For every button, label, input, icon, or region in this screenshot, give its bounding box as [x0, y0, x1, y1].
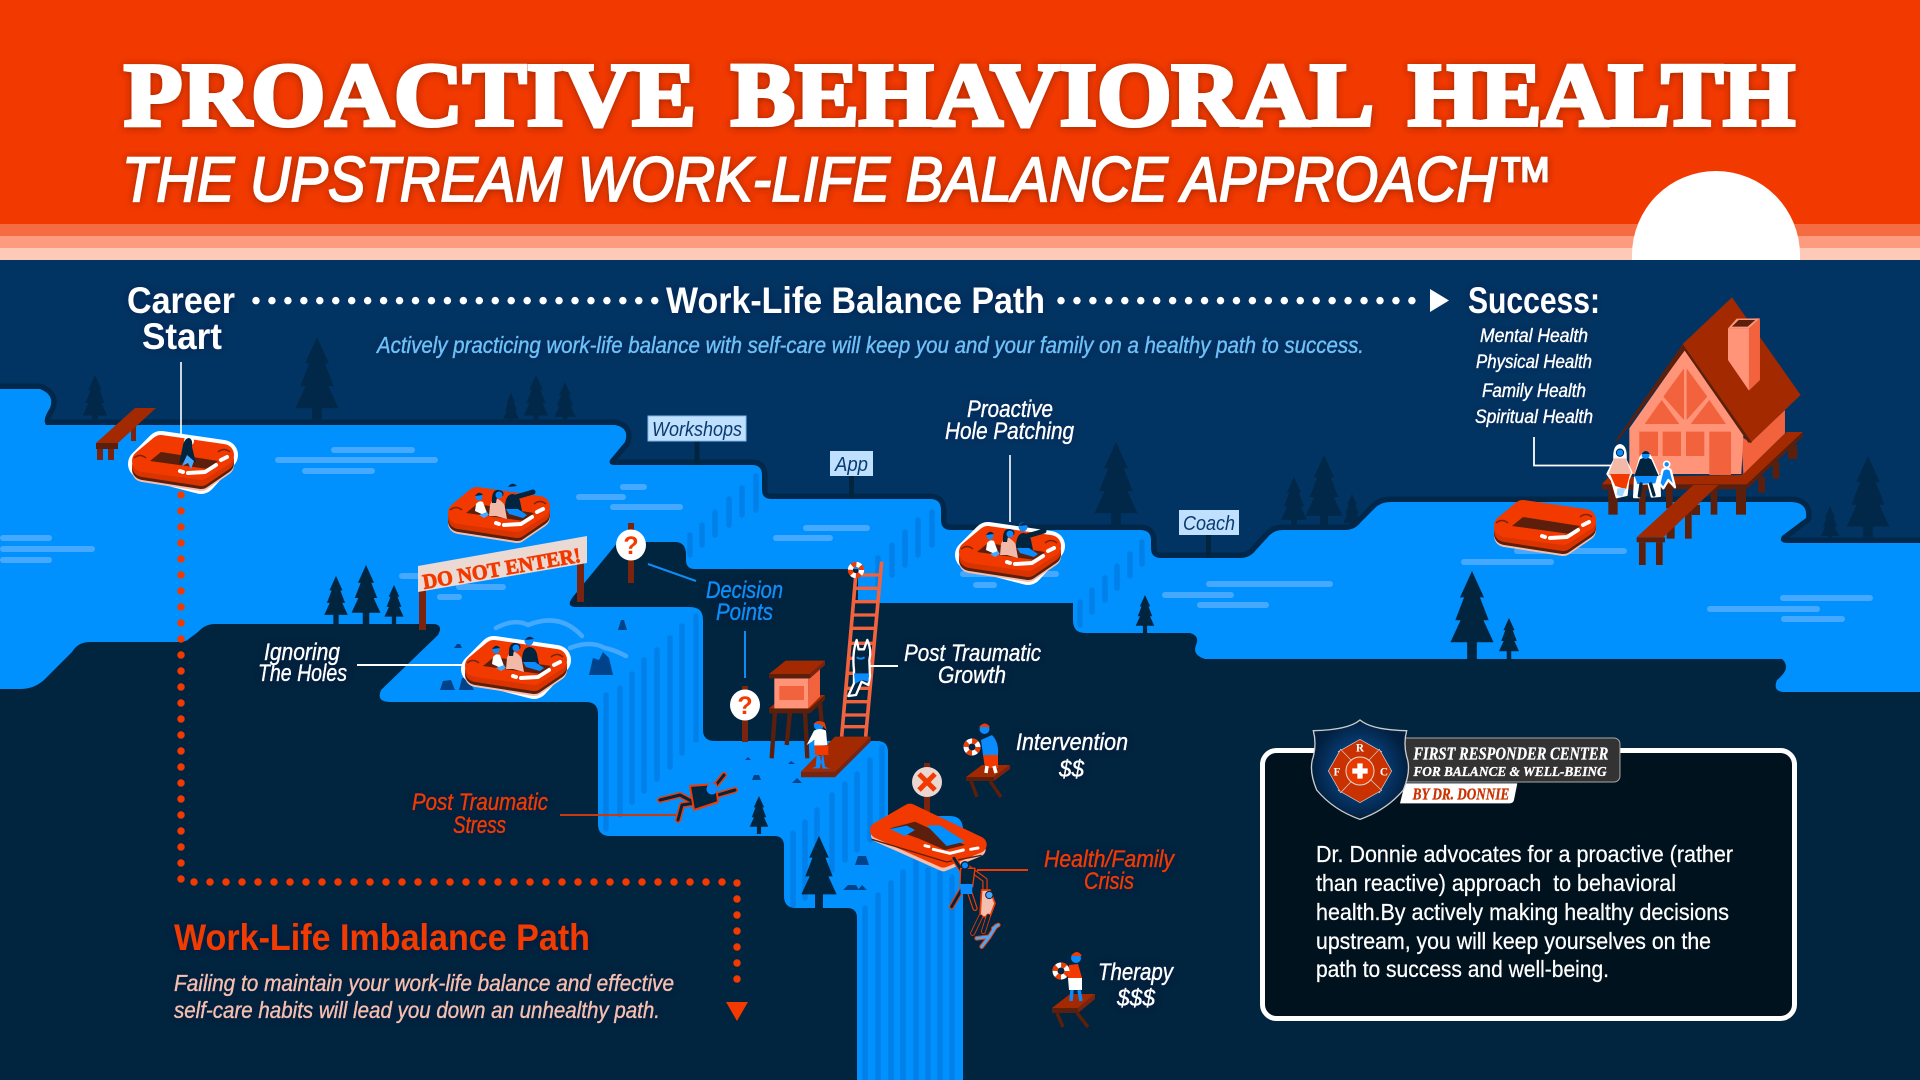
title	[124, 46, 1795, 145]
figure: swimmer in distress	[660, 775, 735, 820]
cabin deck	[1602, 432, 1803, 515]
dotted red path: imbalance	[181, 495, 737, 992]
logo byline: BY DR. DONNIE	[1412, 784, 1509, 803]
cabin roof	[1614, 297, 1801, 443]
trees on the river banks	[324, 565, 1519, 908]
label: therapy: Therapy	[1098, 959, 1175, 986]
logo plate: FIRST RESPONDER CENTER	[1413, 743, 1608, 763]
raft: empty at destination	[1496, 511, 1592, 545]
water swirls	[496, 620, 626, 656]
logo shield	[1311, 720, 1409, 819]
figure: intervention lifeguard	[966, 724, 1010, 797]
raft: family on course	[450, 484, 546, 532]
logo shield: R	[1356, 743, 1365, 755]
signpost: coach	[1179, 510, 1239, 558]
ladder	[842, 562, 882, 737]
raft: career start	[134, 436, 230, 480]
label: decision points	[706, 577, 783, 626]
dock at career start	[96, 408, 156, 460]
label: post traumatic stress: Post Traumatic	[412, 789, 548, 816]
heading: work-life imbalance path: Work-Life Imbalance Path	[174, 917, 590, 958]
label: proactive hole patching: Hole Patching	[945, 418, 1075, 445]
label: proactive hole patching: Proactive	[967, 396, 1053, 423]
label: intervention	[1016, 729, 1128, 783]
raft: ignoring the holes	[467, 636, 563, 685]
family on dock	[1607, 445, 1675, 497]
sign: decision point one: ?	[623, 532, 639, 560]
raft: crisis capsizing	[872, 812, 982, 864]
connector: post traumatic growth	[870, 665, 898, 667]
arrow: balance path	[1430, 289, 1449, 312]
figure: climbing person	[848, 640, 870, 696]
subtitle: THE UPSTREAM WORK-LIFE BALANCE APPROACH™	[122, 145, 1553, 215]
sign: crossed out	[912, 763, 942, 813]
banner: do not enter	[418, 536, 587, 630]
heading: career start: Start	[142, 316, 222, 357]
list: success items	[1475, 326, 1593, 428]
panel text: Dr. Donnie advocates for a proactive (rather	[1316, 841, 1733, 867]
label: intervention: $$	[1058, 756, 1085, 783]
heading: work-life balance path: Work-Life Balance Path	[666, 280, 1045, 321]
signpost: app: App	[834, 454, 868, 476]
label: therapy	[1098, 959, 1175, 1012]
river water	[0, 389, 1920, 1080]
panel text: health.By actively making healthy decisions	[1316, 899, 1729, 925]
list: success items: Physical Health	[1476, 352, 1592, 373]
label: intervention: Intervention	[1016, 729, 1128, 756]
logo: First Responder Center	[1311, 720, 1620, 819]
heading: career start: Career	[127, 280, 235, 321]
connector: hole patching	[1009, 455, 1011, 522]
cabin	[1602, 297, 1803, 565]
label: post traumatic growth: Growth	[938, 662, 1006, 689]
text: imbalance description	[174, 970, 674, 1023]
label: post traumatic growth	[904, 640, 1041, 689]
panel: about Dr. Donnie	[1262, 750, 1794, 1018]
label: health family crisis	[1044, 846, 1176, 895]
raft: proactive hole patching	[961, 522, 1057, 571]
connector: decision point two	[744, 631, 746, 678]
heading: career start	[127, 280, 235, 357]
list: success items: Family Health	[1482, 381, 1586, 402]
title: BEHAVIORAL	[731, 46, 1374, 145]
list: success items: Spiritual Health	[1475, 407, 1593, 428]
panel text: than reactive) approach to behavioral	[1316, 870, 1676, 896]
tagline: Actively practicing work-life balance with self-care will keep you and your family on a healthy path to success.	[375, 332, 1364, 358]
label: health family crisis: Health/Family	[1044, 846, 1176, 873]
waterfall stripes	[606, 476, 1142, 1080]
connector: success to family	[1534, 437, 1615, 466]
watchtower	[769, 661, 825, 758]
water ripples	[0, 447, 1873, 622]
heading: success: Success:	[1468, 280, 1600, 321]
label: proactive hole patching	[945, 396, 1075, 445]
background: ground	[0, 260, 1920, 1080]
signpost: coach: Coach	[1183, 513, 1235, 535]
label: ignoring the holes	[258, 639, 347, 687]
text: imbalance description: Failing to maintain your work-life balance and effective	[174, 970, 674, 996]
list: success items: Mental Health	[1480, 326, 1588, 347]
label: therapy: $$$	[1116, 985, 1156, 1012]
sign: decision point one	[616, 523, 646, 583]
banner: do not enter: DO NOT ENTER!	[421, 543, 583, 594]
dotted white path: work-life balance	[256, 297, 1420, 304]
cabin dock	[1637, 485, 1718, 565]
connector: crisis	[977, 869, 1028, 871]
label: post traumatic stress	[412, 789, 548, 839]
title: PROACTIVE	[124, 46, 696, 145]
rocks	[440, 620, 869, 890]
connector: ignoring the holes	[357, 664, 462, 666]
arrow: imbalance path	[726, 1002, 748, 1021]
text: imbalance description: self-care habits will lead you down an unhealthy path.	[174, 997, 660, 1023]
panel text: path to success and well-being.	[1316, 956, 1609, 982]
logo plate: FOR BALANCE & WELL-BEING	[1412, 765, 1607, 780]
connector: decision point one	[648, 564, 696, 581]
connector: career start	[180, 362, 182, 436]
cabin walls	[1629, 349, 1785, 475]
panel text: upstream, you will keep yourselves on the	[1316, 928, 1711, 954]
label: decision points: Points	[716, 599, 773, 626]
panel text	[1316, 841, 1733, 982]
title: HEALTH	[1408, 46, 1795, 145]
signpost: workshops: Workshops	[652, 419, 742, 441]
signpost: app	[830, 451, 873, 499]
cabin chimney	[1728, 318, 1760, 391]
logo plate	[1401, 738, 1620, 782]
label: decision points: Decision	[706, 577, 783, 604]
logo shield: F	[1334, 766, 1341, 778]
label: health family crisis: Crisis	[1084, 868, 1134, 895]
figure: person at ladder base	[807, 721, 830, 769]
sign: decision point two: ?	[737, 692, 753, 720]
platform	[801, 737, 871, 777]
trees on the far shore	[83, 337, 1889, 543]
sun	[1632, 171, 1800, 260]
signpost: workshops	[648, 416, 746, 465]
label: ignoring the holes: The Holes	[258, 660, 347, 687]
panel frame	[1262, 750, 1794, 1018]
label: ignoring the holes: Ignoring	[264, 639, 341, 666]
sign: decision point two	[730, 686, 760, 742]
header banner	[0, 0, 1920, 260]
label: post traumatic growth: Post Traumatic	[904, 640, 1041, 667]
logo shield: C	[1380, 766, 1388, 778]
label: post traumatic stress: Stress	[453, 812, 506, 839]
figure: family falling	[952, 858, 998, 947]
connector: post traumatic stress	[560, 814, 676, 816]
background: sky	[0, 260, 1920, 558]
figure: therapy lifeguard	[1052, 952, 1095, 1027]
river shoreline	[0, 389, 1920, 558]
